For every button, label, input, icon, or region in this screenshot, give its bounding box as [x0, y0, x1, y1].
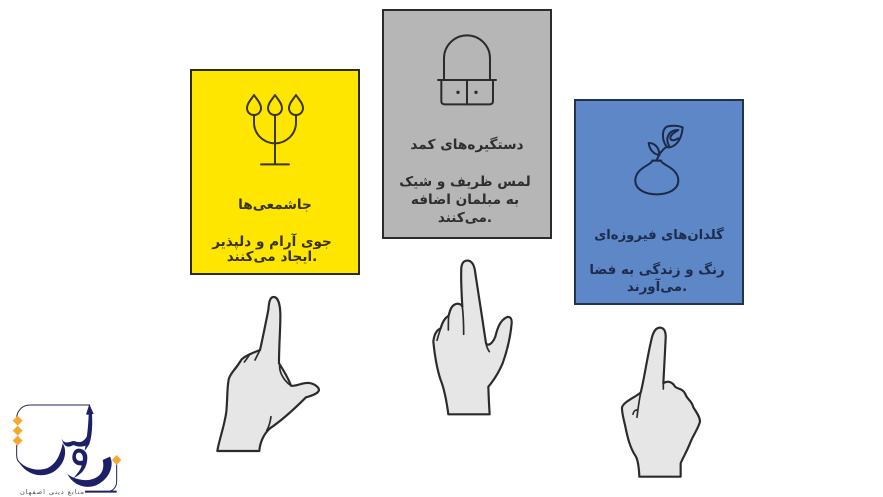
panel: small handles: [383, 10, 551, 238]
text: small handles description: می‌کنند.: [438, 210, 492, 226]
text: small handles description: لمس ظریف و شیک: [399, 174, 531, 190]
logo tagline: منابع دینی اصفهان: [20, 488, 84, 496]
icon: hand pointing to candle holders: [217, 297, 319, 451]
icon: cabinet with handles: [438, 35, 496, 104]
heading: turquoise vases: گلدان‌های فیروزه‌ای: [594, 227, 724, 243]
heading: small handles: دستگیره‌های کمد: [410, 136, 524, 153]
logo: Ravis: [13, 404, 121, 496]
text: candle holders description: [211, 233, 332, 265]
text: small handles description: [399, 174, 531, 226]
icon: hand pointing to small handles: [433, 261, 512, 414]
panel: turquoise vases: [575, 100, 743, 304]
text: turquoise vases description: رنگ و زندگی به فضا: [589, 261, 725, 278]
panel background: grey: [383, 10, 551, 238]
panel background: yellow: [191, 70, 359, 274]
logo diamonds: [13, 416, 121, 465]
icon: candelabra: [247, 95, 303, 164]
panel background: blue: [575, 100, 743, 304]
logo frame: [17, 405, 117, 492]
text: candle holders description: ایجاد می‌کنند.: [227, 249, 317, 265]
panel: candle holders: [191, 70, 359, 274]
heading: candle holders: جاشمعی‌ها: [238, 197, 312, 213]
text: turquoise vases description: [589, 261, 725, 295]
icon: vase with flower: [635, 126, 683, 194]
text: turquoise vases description: می‌آورند.: [627, 278, 687, 295]
text: candle holders description: جوی آرام و دلپذیر: [211, 233, 332, 250]
text: small handles description: به مبلمان اضافه: [411, 192, 519, 208]
logo artwork: [13, 404, 121, 493]
icon: hand pointing to turquoise vases: [622, 328, 700, 477]
logo calligraphy: [17, 404, 117, 493]
